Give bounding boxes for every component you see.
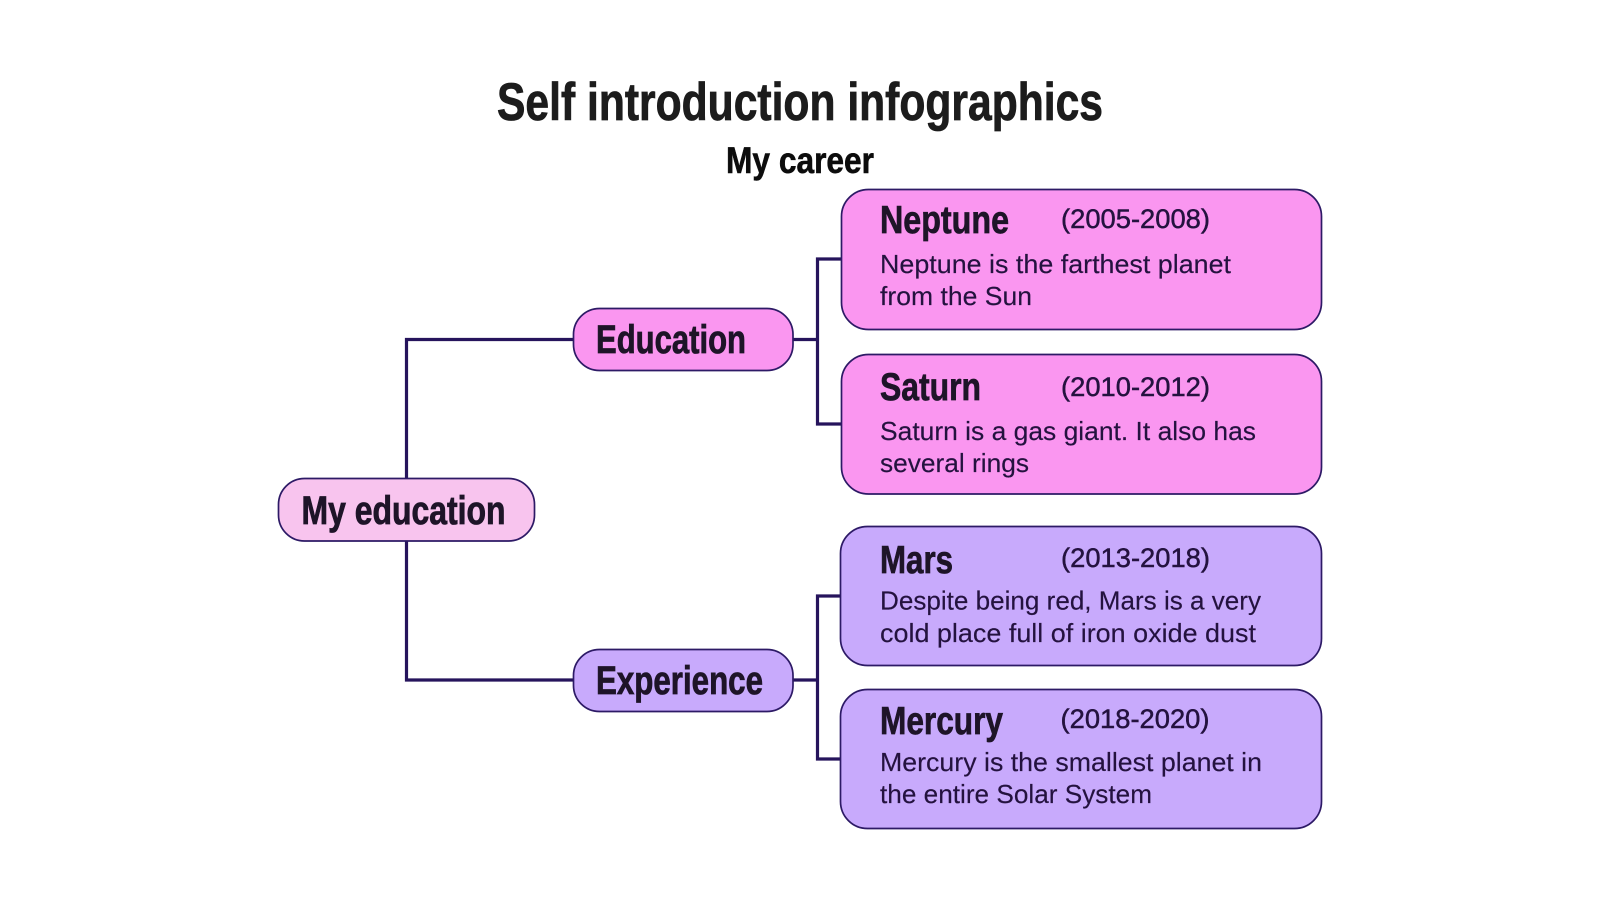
node: education bbox=[574, 308, 793, 370]
card: Mars bbox=[840, 526, 1322, 666]
card: Mars: cold place full of iron oxide dust bbox=[880, 618, 1257, 648]
subtitle: My career bbox=[726, 139, 874, 181]
title: Self introduction infographics bbox=[497, 73, 1103, 132]
card: Saturn bbox=[842, 354, 1322, 494]
node: my education: My education bbox=[302, 489, 506, 533]
card: Mars: (2013-2018) bbox=[1061, 543, 1210, 573]
node: experience bbox=[574, 650, 793, 712]
card: Mercury: Mercury bbox=[880, 700, 1003, 743]
card: Saturn: Saturn is a gas giant. It also has bbox=[880, 416, 1256, 446]
card: Saturn: (2010-2012) bbox=[1061, 372, 1210, 402]
card: Mercury: the entire Solar System bbox=[880, 779, 1152, 809]
card: Neptune: (2005-2008) bbox=[1061, 204, 1210, 234]
card: Neptune: Neptune bbox=[880, 199, 1009, 242]
node: my education bbox=[278, 478, 534, 541]
node: experience: Experience bbox=[596, 659, 763, 703]
card: Mars: Mars bbox=[880, 539, 953, 582]
card: Mars: Despite being red, Mars is a very bbox=[880, 586, 1261, 616]
card: Saturn: several rings bbox=[880, 448, 1029, 478]
card: Neptune: from the Sun bbox=[880, 281, 1032, 311]
connector: education to cards bbox=[793, 259, 841, 424]
card: Mercury: (2018-2020) bbox=[1060, 704, 1210, 734]
card: Mercury bbox=[840, 690, 1322, 828]
node: education: Education bbox=[596, 318, 746, 362]
card: Neptune: Neptune is the farthest planet bbox=[880, 249, 1232, 279]
card: Mercury: Mercury is the smallest planet in bbox=[880, 747, 1262, 777]
connector: root to branches bbox=[406, 340, 573, 680]
connector: experience to cards bbox=[793, 596, 840, 759]
card: Saturn: Saturn bbox=[880, 366, 981, 409]
card: Neptune bbox=[842, 190, 1322, 330]
